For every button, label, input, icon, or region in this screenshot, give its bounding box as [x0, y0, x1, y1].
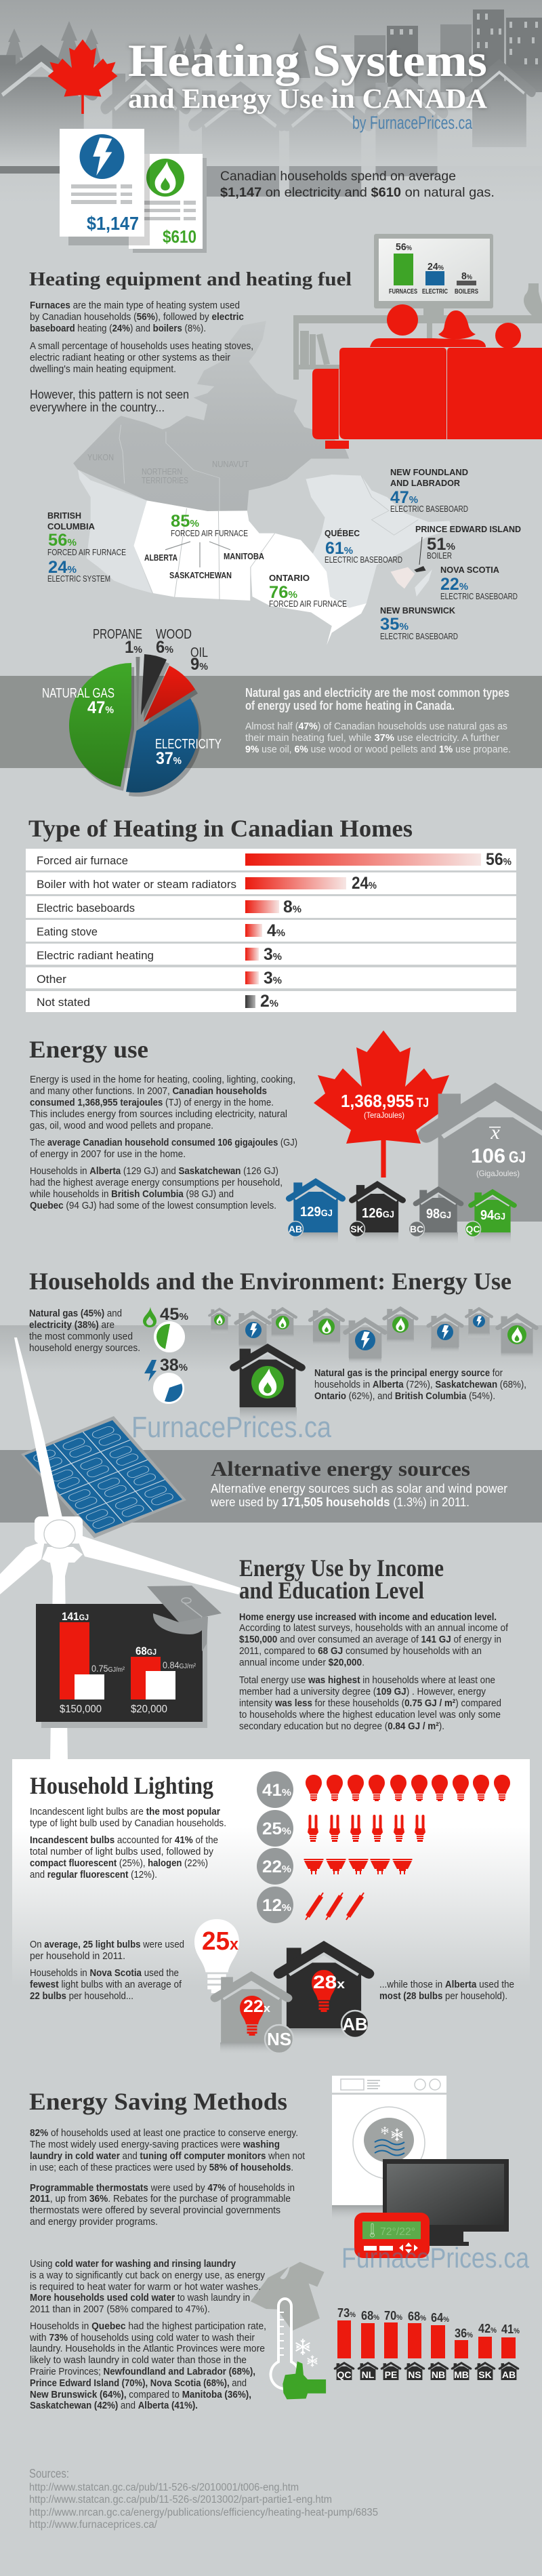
map label: New Brunswick: 35% — [380, 615, 409, 634]
income and education text: According to latest surveys, households with an annual income of — [239, 1622, 509, 1634]
watermark: FurnacePrices.ca — [131, 1411, 331, 1444]
bar chart: cold water washing by province: MB — [454, 2369, 469, 2380]
bar chart: cold water washing by province: AB — [502, 2369, 516, 2380]
leaf units label — [364, 1096, 429, 1120]
energy saving text: laundry in cold water and tuning off computer monitors when not — [30, 2150, 306, 2162]
cold water text: is a way to significantly cut back on energy use, as energy — [30, 2270, 265, 2281]
households text: the most commonly used — [29, 1331, 133, 1342]
energy use text: while households in British Columbia (98 GJ) and — [29, 1188, 234, 1200]
energy use text: had the highest average energy consumptions per household, — [30, 1177, 283, 1188]
intro text: $1,147 on electricity and $610 on natural gas. — [220, 185, 495, 200]
bulb counts text: 22 bulbs per household... — [30, 1990, 133, 2002]
lighting text: Incandescent bulbs accounted for 41% of the — [30, 1834, 218, 1846]
map label: Quebec: QUÉBEC — [325, 528, 360, 538]
energy saving text — [30, 2127, 306, 2228]
energy saving text: 2011, up from 36%. Rebates for the purchase of programmable — [30, 2193, 291, 2205]
pictogram: halogen bulbs: 22% — [262, 1857, 291, 1876]
income and education text: secondary education but no degree (0.84 GJ / m²). — [239, 1720, 444, 1732]
large house: average consumption: 106 — [471, 1145, 505, 1167]
map label: prairies: FORCED AIR FURNACE — [171, 528, 248, 538]
map label: Quebec: 61% — [325, 539, 353, 558]
lighting text — [30, 1806, 226, 1880]
pictogram: halogen bulbs — [257, 1848, 412, 1885]
house: Saskatchewan: 126GJ — [362, 1206, 394, 1221]
heating equipment text: Furnaces are the main type of heating system used — [30, 300, 240, 311]
big white bulb: national average — [194, 1919, 239, 1993]
bulb counts text: fewest light bulbs with an average of — [30, 1979, 182, 1990]
bar chart: cold water washing by province: 70% — [384, 2309, 402, 2322]
map label: Nova Scotia: NOVA SCOTIA — [440, 565, 500, 575]
house: Alberta bulbs: 28 x — [313, 1972, 345, 1992]
byline: by FurnacePrices.ca — [352, 113, 473, 133]
map label: prairies: MANITOBA — [224, 551, 265, 561]
map label: Newfoundland and Labrador: ELECTRIC BASEBOARD — [390, 504, 468, 514]
leaf units label: TJ — [417, 1096, 429, 1110]
pie labels — [42, 627, 222, 768]
energy use text: and many other functions. In 2007, Canadian households — [30, 1085, 267, 1097]
large house: average consumption: (GigaJoules) — [476, 1169, 520, 1178]
bar chart: cold water washing by province: 73% — [337, 2306, 356, 2320]
bar chart: cold water washing by province: 41% — [501, 2322, 520, 2336]
bar chart: type of heating: 3% — [264, 945, 282, 964]
heating equipment text: by Canadian households (56%), followed by electric — [30, 311, 244, 323]
lighting text: total number of light bulbs used, followed by — [30, 1846, 213, 1857]
heading: heating equipment: Heating equipment and heating fuel — [29, 268, 352, 290]
bar chart: type of heating: Electric radiant heating — [37, 949, 154, 962]
illustration: thermostat: 72°/22° — [380, 2226, 415, 2238]
map label: Ontario: FORCED AIR FURNACE — [269, 599, 347, 609]
income and education text: Total energy use was highest in households where at least one — [239, 1674, 495, 1686]
chart: energy use by income: 141GJ — [62, 1610, 89, 1623]
heating equipment text: everywhere in the country... — [30, 400, 165, 414]
TV with bar chart: FURNACES — [389, 288, 417, 296]
illustration: washing machine — [332, 2076, 446, 2221]
band text: fuels: Almost half (47%) of Canadian households use natural gas as — [245, 721, 507, 732]
bar chart: type of heating: 2% — [260, 992, 278, 1011]
chart: energy use by income: 0.75GJ/m² — [91, 1663, 125, 1674]
households text — [29, 1308, 140, 1354]
bar chart: type of heating: 3% — [264, 969, 282, 988]
house: Quebec — [465, 1189, 517, 1245]
lighting text: and regular fluorescent (12%). — [30, 1869, 157, 1880]
bulb counts text: most (28 bulbs per household). — [379, 1990, 507, 2002]
bar chart: type of heating: Electric baseboards — [37, 902, 135, 914]
map label: New Brunswick: NEW BRUNSWICK — [380, 605, 456, 616]
big house: natural gas — [230, 1344, 306, 1425]
cold water text: is required to heat water for warm or hot water washes. — [30, 2281, 261, 2293]
TV with bar chart — [374, 234, 493, 315]
households text: household energy sources. — [29, 1342, 140, 1354]
house: Alberta: 129GJ — [300, 1205, 333, 1220]
energy use text: consumed 1,368,955 terajoules (TJ) of energy in the home. — [30, 1097, 274, 1108]
bar chart: type of heating: Boiler with hot water or steam radiators — [37, 878, 236, 891]
row of small houses — [208, 1306, 539, 1365]
map label: British Columbia: 56% — [48, 531, 77, 550]
pie labels: WOOD — [156, 627, 192, 642]
bar chart: cold water washing by province: 68% — [361, 2309, 379, 2322]
bulb counts text: Households in Nova Scotia used the — [30, 1967, 179, 1979]
energy saving text: thermostats were offered by several provincial governments — [30, 2205, 280, 2216]
map label: British Columbia: 24% — [48, 558, 77, 577]
large house: average consumption: GJ — [509, 1148, 526, 1167]
icon: bills: $1,147 — [87, 213, 139, 234]
bar chart: cold water washing by province: 36% — [455, 2327, 473, 2340]
heating equipment text — [30, 300, 253, 414]
house: British Columbia: 98GJ — [426, 1207, 451, 1222]
map label: Nova Scotia: ELECTRIC BASEBOARD — [440, 591, 518, 601]
house: Alberta bulbs: AB — [342, 2014, 368, 2034]
map label: New Brunswick — [380, 605, 458, 641]
chart: energy use by income: $20,000 — [131, 1704, 167, 1715]
map label: Quebec — [325, 528, 402, 565]
bar chart: type of heating: Forced air furnace — [37, 854, 128, 867]
heading: household lighting: Household Lighting — [30, 1772, 213, 1799]
cold water text: Households in Quebec had the highest participation rate, — [30, 2320, 266, 2332]
TV with bar chart: 8% — [461, 270, 472, 282]
bar chart: cold water washing by province: SK — [478, 2369, 492, 2380]
energy use text: gas, oil, wood and wood pellets and propane. — [30, 1120, 213, 1131]
bar chart: type of heating: 8% — [283, 898, 301, 917]
chart: energy use by income: 0.84GJ/m² — [163, 1659, 196, 1670]
cold water text: Using cold water for washing and rinsing laundry — [30, 2258, 236, 2270]
energy saving text: 82% of households used at least one practice to conserve energy. — [30, 2127, 298, 2139]
pie labels: ELECTRICITY — [155, 737, 222, 752]
pictogram: regular fluorescent tubes — [257, 1887, 364, 1923]
band text: fuels — [245, 686, 511, 755]
alternative energy heading and text: were used by 171,505 households (1.3%) in 2011. — [210, 1495, 470, 1509]
map label: British Columbia: FORCED AIR FURNACE — [47, 547, 126, 557]
bar chart: cold water washing by province: PE — [385, 2369, 397, 2380]
bar chart: type of heating: Other — [37, 973, 66, 986]
bar chart: cold water washing by province: NL — [362, 2369, 375, 2380]
electricity share — [144, 1356, 188, 1404]
icon: bills: $610 — [163, 226, 196, 247]
energy saving text: Programmable thermostats were used by 47% of households in — [30, 2182, 295, 2194]
pictogram: compact fluorescent bulbs: 25% — [262, 1819, 291, 1838]
heating equipment text: However, this pattern is not seen — [30, 387, 189, 401]
map territory labels: NUNAVUT — [212, 459, 249, 469]
house: Saskatchewan: SK — [350, 1224, 364, 1234]
natural gas share — [143, 1305, 188, 1352]
heading: energy saving methods: Energy Saving Methods — [29, 2088, 287, 2115]
map label: British Columbia: COLUMBIA — [47, 521, 96, 531]
pie labels: 1% — [125, 638, 142, 657]
house: Nova Scotia bulbs: NS — [267, 2029, 291, 2049]
cold water text: New Brunswick (64%), compared to Manitoba (36%), — [30, 2389, 251, 2400]
pie labels: OIL — [190, 645, 208, 660]
TV with bar chart: ELECTRIC — [422, 288, 448, 296]
TV with bar chart: 24% — [428, 261, 444, 273]
map label: Newfoundland and Labrador — [390, 467, 468, 514]
sources: Sources: — [29, 2467, 69, 2480]
energy use text: Quebec (94 GJ) had some of the lowest consumption levels. — [30, 1200, 276, 1211]
map territory labels: YUKON — [87, 452, 114, 462]
title: and Energy Use in CANADA — [128, 83, 487, 114]
map label: Quebec: ELECTRIC BASEBOARD — [325, 555, 402, 565]
bulb counts text: On average, 25 light bulbs were used — [30, 1939, 184, 1950]
pie labels: 37% — [156, 749, 182, 768]
house: Alberta bulbs — [274, 1941, 374, 2042]
energy use text: Energy is used in the home for heating, cooling, lighting, cooking, — [30, 1074, 295, 1085]
TV with bar chart: BOILERS — [455, 288, 478, 296]
pie labels: 47% — [87, 698, 114, 717]
map label: Ontario: ONTARIO — [269, 573, 310, 583]
heading: type of heating: Type of Heating in Canadian Homes — [28, 815, 413, 842]
lighting text: type of light bulb used by Canadian households. — [30, 1817, 226, 1829]
pictogram: regular fluorescent tubes: 12% — [262, 1896, 291, 1915]
red couch with family — [312, 304, 542, 449]
natural gas principal source text: Ontario (62%), and British Columbia (54%). — [314, 1390, 495, 1402]
income and education text: member had a university degree (109 GJ) . However, energy — [239, 1686, 486, 1697]
alternative energy heading and text — [210, 1457, 507, 1509]
chart: energy use by income — [36, 1604, 207, 1728]
bar chart: type of heating — [26, 849, 516, 1012]
bar chart: cold water washing by province: QC — [337, 2369, 351, 2380]
cold water text: laundry. Households in the Atlantic Provinces were more — [30, 2343, 265, 2354]
map label: Newfoundland and Labrador: NEW FOUNDLAND — [390, 467, 468, 477]
energy saving text: and energy provider programs. — [30, 2216, 158, 2228]
map label: British Columbia: BRITISH — [47, 510, 81, 521]
pictogram: compact fluorescent bulbs — [257, 1810, 425, 1847]
map label: Newfoundland and Labrador: 47% — [390, 488, 418, 507]
pie labels: 6% — [156, 638, 173, 657]
large maple leaf: total consumption — [314, 1030, 453, 1178]
sources: http://www.furnaceprices.ca/ — [29, 2519, 158, 2531]
bar chart: type of heating: Eating stove — [37, 925, 98, 938]
house: Nova Scotia bulbs: 22x — [243, 1997, 271, 2016]
TV with bar chart: 56% — [396, 241, 412, 253]
large house: average consumption: x — [490, 1121, 500, 1144]
header illustration: trees, buildings and houses — [0, 0, 542, 203]
large maple leaf: total consumption: 1,368,955 — [341, 1091, 414, 1111]
energy saving text: The most widely used energy-saving practices were washing — [30, 2139, 280, 2150]
energy use text: The average Canadian household consumed 106 gigajoules (GJ) — [30, 1137, 297, 1148]
map label: Prince Edward Island: 51% — [427, 535, 455, 554]
soft band — [0, 1325, 542, 1373]
income and education text: $150,000 and over consumed an average of 141 GJ of energy in — [239, 1634, 501, 1645]
house: Quebec: 94GJ — [480, 1208, 505, 1223]
map label: prairies: SASKATCHEWAN — [169, 570, 232, 580]
natural gas principal source text — [314, 1367, 526, 1402]
intro text — [220, 169, 495, 200]
band text: fuels: 9% use oil, 6% use wood or wood pellets and 1% use propane. — [245, 744, 511, 755]
map label: Ontario — [269, 573, 347, 609]
households text: Natural gas (45%) and — [29, 1308, 122, 1319]
band text: fuels: their main heating fuel, while 37% use electricity. A further — [245, 732, 499, 744]
heading: energy use by income: Energy Use by Income — [239, 1554, 444, 1582]
solar panel — [21, 1416, 186, 1538]
map label: Prince Edward Island — [415, 524, 521, 565]
alternative energy heading and text: Alternative energy sources — [211, 1457, 470, 1481]
map of Canada — [73, 321, 453, 645]
alternative energy heading and text: Alternative energy sources such as solar and wind power — [211, 1481, 507, 1495]
panel: household lighting — [12, 1759, 530, 1986]
title — [128, 35, 487, 114]
map label: Prince Edward Island: BOILER — [427, 550, 452, 561]
sources: http://www.statcan.gc.ca/pub/11-526-s/2013002/part-partie1-eng.htm — [29, 2494, 332, 2505]
energy use text: of energy in 2007 for use in the home. — [30, 1148, 186, 1160]
natural gas share: 45% — [160, 1305, 188, 1324]
house: British Columbia: BC — [410, 1224, 423, 1234]
energy use text — [29, 1074, 297, 1211]
map label: British Columbia — [47, 510, 126, 584]
house: British Columbia — [409, 1186, 463, 1245]
chart: energy use by income: $150,000 — [60, 1704, 102, 1715]
cold water text: Prairie Provinces; Newfoundland and Labrador (68%), — [30, 2366, 255, 2377]
pie labels: 9% — [190, 655, 208, 674]
natural gas principal source text: Natural gas is the principal energy source for — [314, 1367, 503, 1379]
illustration: t-shirt — [251, 2262, 325, 2331]
cold water text: likely to wash laundry in cold water than those in the — [30, 2354, 247, 2366]
bulb counts text: ...while those in Alberta used the — [379, 1979, 514, 1990]
house: Nova Scotia bulbs — [210, 1971, 293, 2055]
cold water text — [29, 2258, 266, 2411]
map label: Newfoundland and Labrador: AND LABRADOR — [390, 478, 461, 488]
energy saving text: in use; each of these practices were used by 58% of households. — [30, 2162, 293, 2173]
band text: fuels: of energy used for home heating in Canada. — [245, 699, 455, 712]
map label: prairies: 85% — [171, 512, 199, 531]
wind turbine — [0, 1337, 242, 1763]
icon: graduation cap — [147, 1586, 222, 1651]
cold water text: 2011 than in 2007 (58% compared to 47%). — [30, 2303, 210, 2315]
grey band: alternative energy — [0, 1450, 542, 1523]
heating equipment text: baseboard heating (24%) and boilers (8%). — [30, 323, 206, 334]
electricity share: 38% — [160, 1356, 188, 1375]
house: Alberta — [286, 1178, 346, 1245]
bulb counts text — [30, 1939, 514, 2002]
sources: http://www.nrcan.gc.ca/energy/publications/efficiency/heating-heat-pump/6835 — [29, 2507, 378, 2518]
cold water text: Prince Edward Island (70%), Nova Scotia (68%), and — [30, 2377, 247, 2389]
intro text: Canadian households spend on average — [220, 169, 456, 184]
icon: bills — [60, 129, 207, 253]
bar chart: type of heating: Not stated — [37, 996, 90, 1009]
chart: energy use by income: 68GJ — [136, 1645, 157, 1657]
house: Alberta: AB — [289, 1224, 302, 1234]
map label: Nova Scotia: 22% — [440, 575, 468, 594]
lighting text: Incandescent light bulbs are the most popular — [30, 1806, 220, 1817]
pie labels: PROPANE — [93, 627, 142, 642]
heading: households and the environment: Households and the Environment: Energy Use — [29, 1268, 512, 1295]
bar chart: cold water washing by province — [334, 2306, 520, 2380]
house: Saskatchewan — [349, 1181, 406, 1245]
heating equipment text: A small percentage of households uses heating stoves, — [30, 340, 253, 352]
illustration: thermostat — [354, 2213, 430, 2258]
bar chart: cold water washing by province: 42% — [478, 2322, 497, 2335]
bar chart: cold water washing by province: NB — [432, 2369, 445, 2380]
heating equipment text: electric radiant heating or other systems as their — [30, 352, 230, 363]
title: Heating Systems — [128, 35, 487, 86]
map territory labels: TERRITORIES — [142, 475, 188, 485]
grey band behind pie — [0, 676, 542, 768]
big white bulb: national average: 25x — [202, 1927, 239, 1956]
lighting text: compact fluorescent (25%), halogen (22%) — [30, 1857, 208, 1869]
bar chart: type of heating: 4% — [267, 921, 285, 940]
leaf units label: (TeraJoules) — [364, 1110, 404, 1120]
income and education text: annual income under $20,000. — [239, 1657, 364, 1668]
pie chart: home heating fuel — [69, 654, 201, 797]
bar chart: type of heating: 56% — [486, 850, 512, 869]
illustration: computer monitor — [383, 2159, 509, 2246]
pie labels: NATURAL GAS — [42, 686, 114, 701]
households text: electricity (38%) are — [29, 1319, 114, 1331]
bar chart: cold water washing by province: NS — [408, 2369, 421, 2380]
bar chart: cold water washing by province: 64% — [431, 2311, 449, 2325]
income and education text: to households where the highest education level was only some — [239, 1709, 501, 1720]
map label: Nova Scotia — [440, 565, 518, 601]
house: Quebec: QC — [466, 1224, 480, 1234]
large house: average consumption — [418, 1083, 542, 1222]
cold water text: Saskatchewan (42%) and Alberta (41%). — [30, 2400, 198, 2411]
income and education text: Home energy use increased with income and education level. — [239, 1611, 497, 1623]
bulb counts text: per household in 2011. — [30, 1950, 125, 1962]
map label: New Brunswick: ELECTRIC BASEBOARD — [380, 631, 458, 641]
sources: http://www.statcan.gc.ca/pub/11-526-s/2010001/t006-eng.htm — [29, 2482, 299, 2493]
map label: prairies: ALBERTA — [144, 552, 178, 563]
map label: British Columbia: ELECTRIC SYSTEM — [47, 573, 110, 584]
bar chart: cold water washing by province: 68% — [408, 2310, 426, 2323]
income and education text: 2011, compared to 68 GJ consumed by households with an — [239, 1645, 482, 1657]
cold water text: with 73% of households using cold water to wash their — [29, 2332, 255, 2343]
pictogram: incandescent bulbs: 41% — [262, 1781, 291, 1800]
heading: energy use by income: and Education Level — [239, 1577, 424, 1604]
pictogram: incandescent bulbs — [257, 1771, 510, 1808]
income and education text: intensity was less for these households (0.75 GJ / m²) compared — [239, 1697, 501, 1709]
map label: prairies — [144, 512, 265, 580]
bar chart: type of heating: 24% — [352, 874, 377, 893]
map territory labels — [87, 452, 249, 485]
energy use text: Households in Alberta (129 GJ) and Saskatchewan (126 GJ) — [30, 1165, 278, 1177]
energy use text: This includes energy from sources including electricity, natural — [30, 1108, 287, 1120]
income and education text — [239, 1611, 509, 1732]
heading: energy use by income — [239, 1554, 444, 1604]
sources — [29, 2467, 378, 2531]
map label: Prince Edward Island: PRINCE EDWARD ISLAND — [415, 524, 521, 534]
shelf with books and vase — [293, 283, 542, 380]
map label: Ontario: 76% — [269, 583, 297, 602]
icon: thermometer with thumbs up — [271, 2299, 326, 2399]
map territory labels: NORTHERN — [142, 466, 182, 477]
cold water text: More households used cold water to wash laundry in — [30, 2292, 250, 2303]
natural gas principal source text: households in Alberta (72%), Saskatchewan (68%), — [314, 1379, 526, 1390]
heading: energy use: Energy use — [29, 1036, 148, 1063]
heating equipment text: dwelling's main heating equipment. — [30, 363, 176, 375]
icon: maple leaf — [47, 39, 118, 114]
